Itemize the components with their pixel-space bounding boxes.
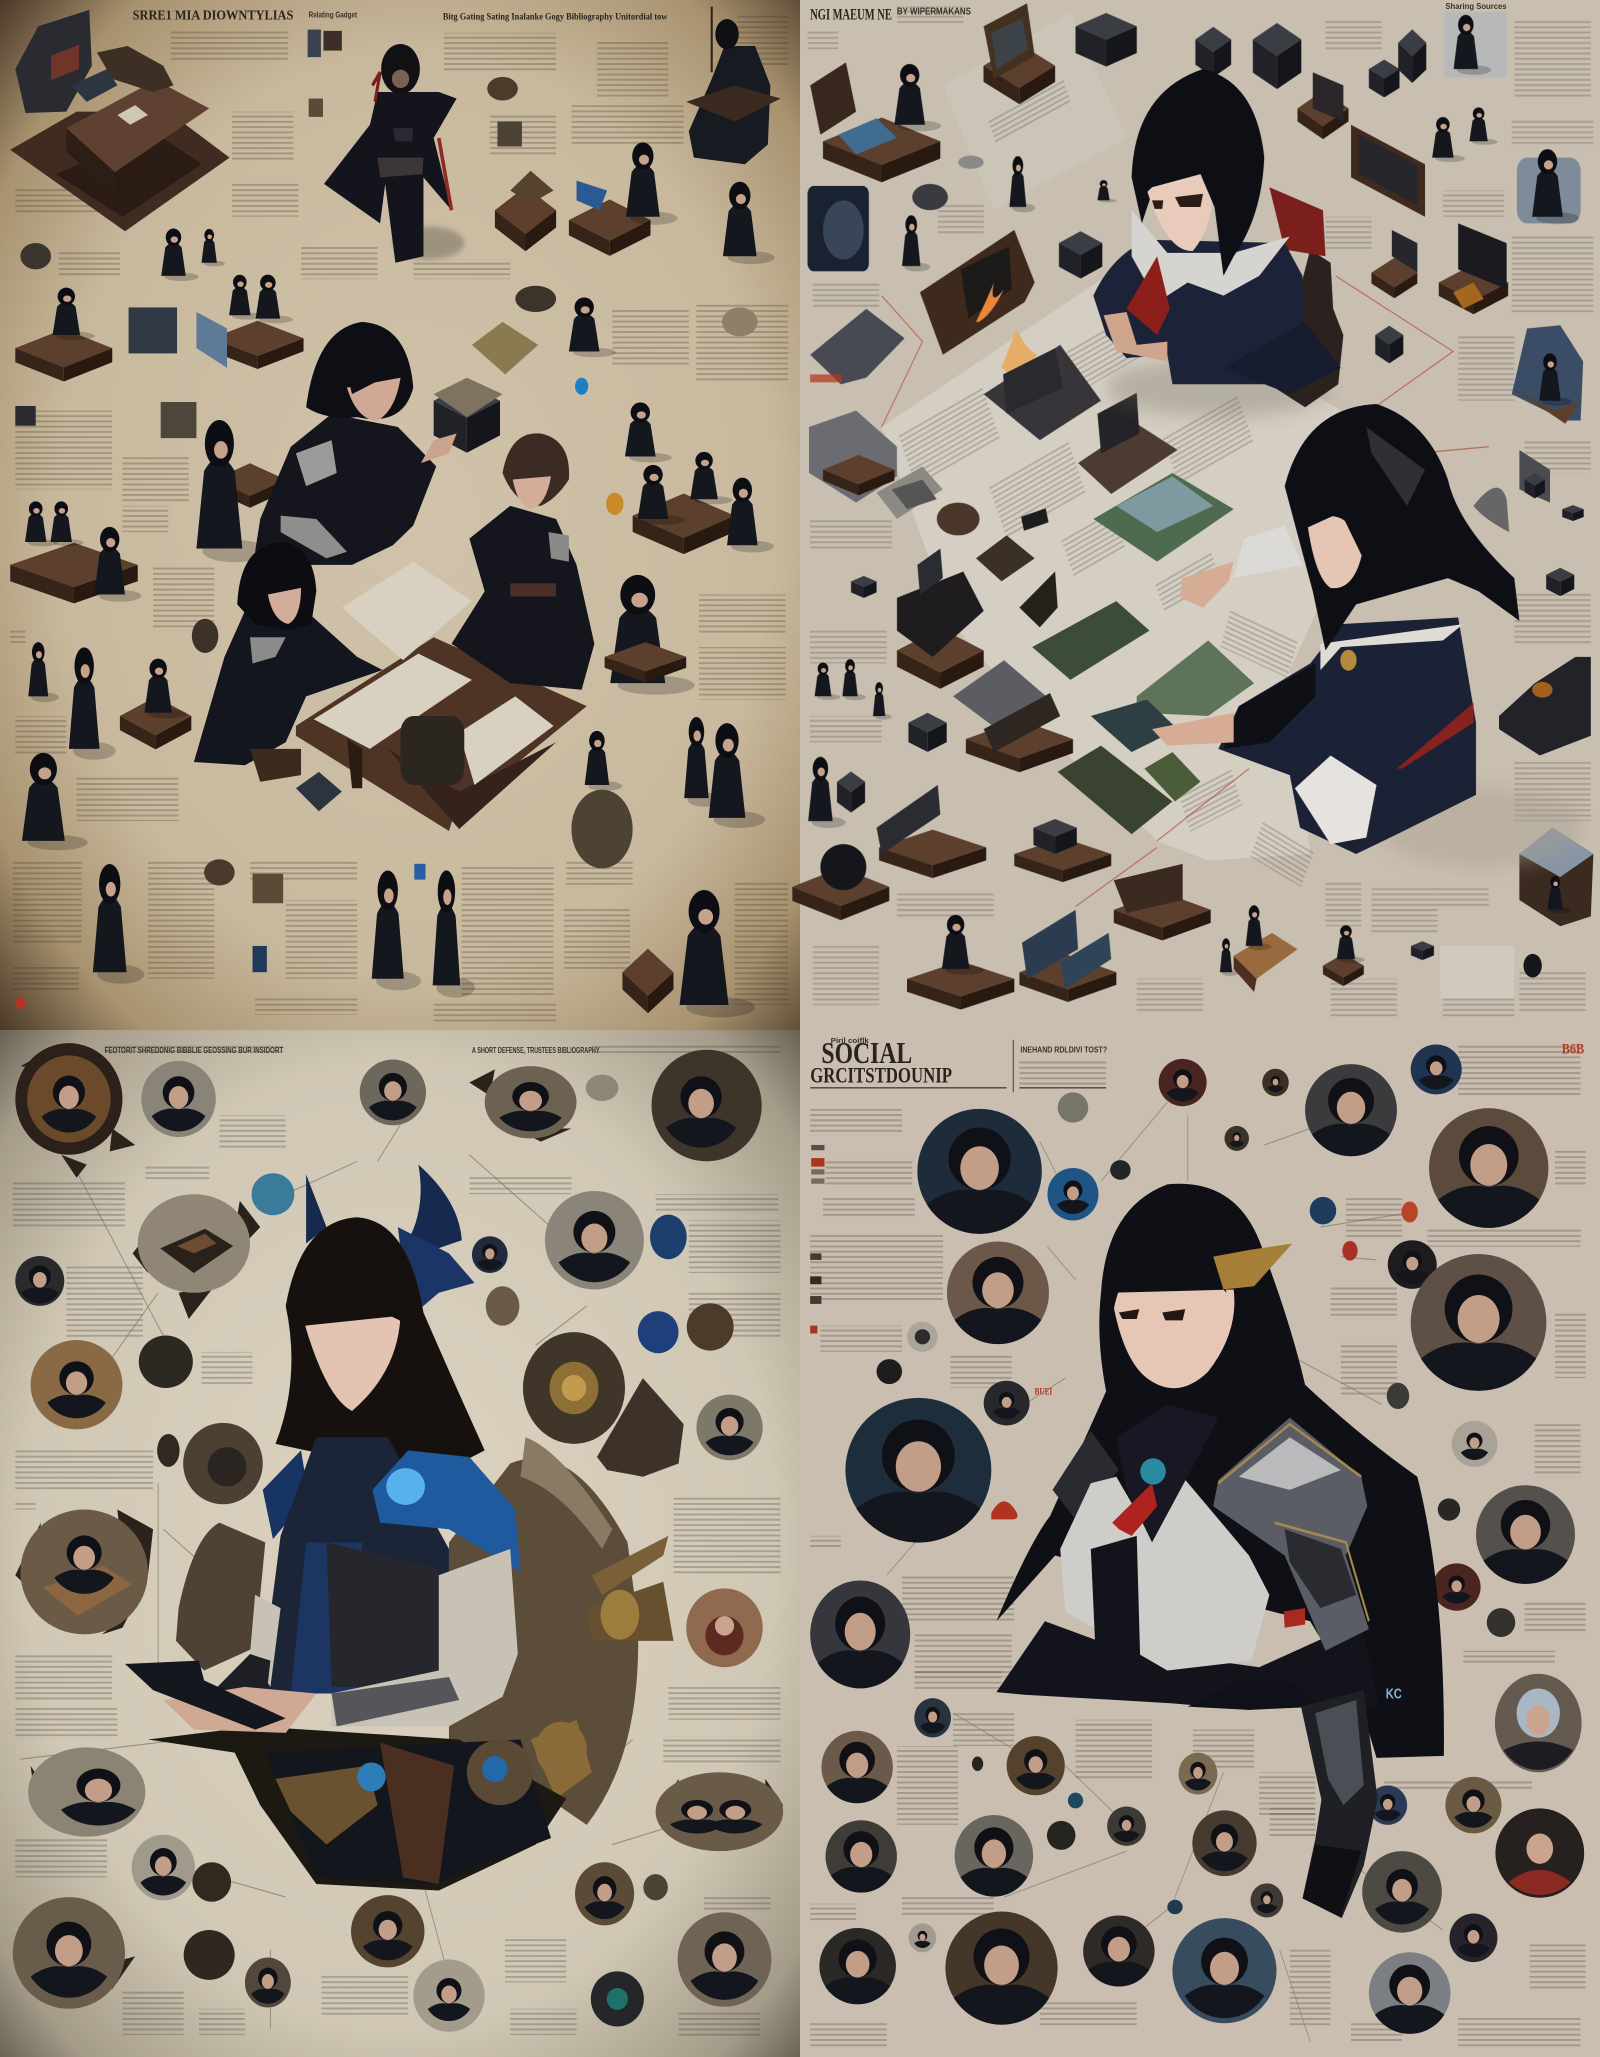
character: brown-haired girl xyxy=(452,433,594,690)
character: girl at centre with silver pauldron xyxy=(255,322,457,565)
heading: BY WIPERMAKANS xyxy=(897,6,971,17)
main character: armoured woman with long black hair xyxy=(996,1184,1444,1918)
panel: bottom-left gears and warrior xyxy=(0,1030,800,2057)
isometric workshop desk xyxy=(10,10,230,231)
portrait circles xyxy=(810,1044,1584,2034)
title: NGI MAEUM NE xyxy=(810,6,892,24)
legend swatches xyxy=(810,1145,824,1333)
heading: FEOTORIT SHREDDNIG BIBBLIE GEOSSING BUR INSIDORT xyxy=(105,1045,283,1055)
title rules xyxy=(810,1040,1106,1092)
central table with open documents xyxy=(296,562,587,831)
thin red leader lines xyxy=(882,276,1489,907)
desks and small figures xyxy=(10,142,775,1017)
main character: armoured woman with long black hair: KC xyxy=(1386,1685,1402,1702)
character: seated mage top-right xyxy=(686,7,781,164)
paper floor with documents xyxy=(882,13,1387,861)
panel: top-left parchment scene xyxy=(0,0,800,1030)
character: girl with hair ornaments, sitting on documents xyxy=(1152,404,1519,854)
title: citizenship: GRCITSTDOUNIP xyxy=(810,1065,952,1088)
small props and images xyxy=(15,30,758,1009)
panel: top-right isometric scene xyxy=(792,0,1600,1030)
character: standing girl in caped coat xyxy=(324,44,464,263)
thin connector lines xyxy=(20,1096,719,2028)
small top-label: Piril coiflk xyxy=(831,1038,869,1045)
heading: gadgets: Relating Gadget xyxy=(309,10,358,20)
title: social: SOCIAL xyxy=(821,1036,912,1070)
character: seated girl with long hair xyxy=(194,542,383,782)
heading: bibliography: Bitg Gating Sating Inalanke Gogy Bibliography Unitordial tow xyxy=(443,11,668,22)
character: girl in navy uniform, leaning on desk xyxy=(1093,69,1343,417)
heading: Sharing Sources xyxy=(1445,4,1507,11)
isometric workstation and props xyxy=(792,3,1593,1010)
red marks: BUEI xyxy=(1035,1387,1052,1397)
heading: top centre: INEHAND RDLDIVI TOST? xyxy=(1020,1045,1107,1055)
main character: warrior with blue pauldron xyxy=(125,1165,587,1884)
red marks xyxy=(991,1387,1052,1519)
scene vignettes in circles xyxy=(13,1043,783,2032)
panel: bottom-right social citizenship portraits xyxy=(800,1030,1600,2057)
red tag top-right: B6B xyxy=(1562,1040,1585,1057)
title: SRRE1 MIA DIOWNTYLIAS xyxy=(133,9,294,23)
large bronze gear machinery behind warrior xyxy=(148,1332,684,1891)
connector lines xyxy=(887,1102,1443,2042)
heading: A SHORT DEFENSE, TRUSTEES BIBLIOGRAPHY xyxy=(472,1045,599,1055)
dark shards around scene vignettes xyxy=(15,1050,783,1989)
